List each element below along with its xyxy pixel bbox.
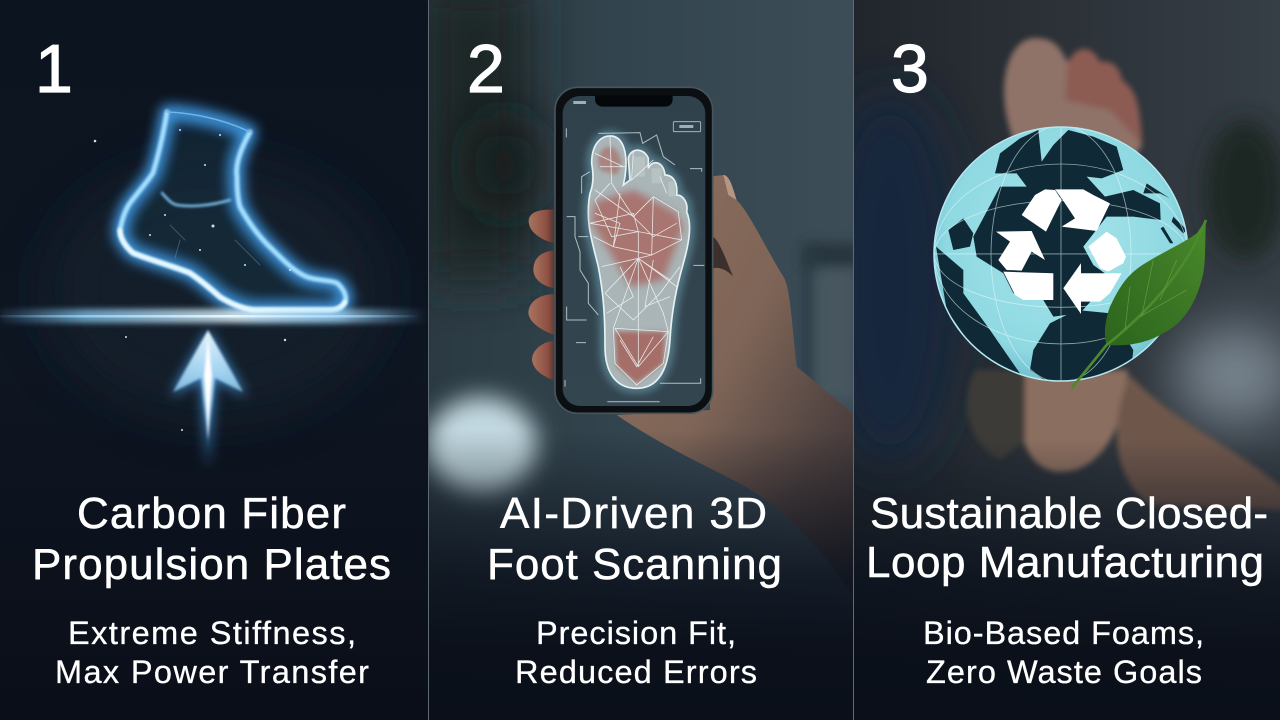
divider — [853, 0, 854, 720]
heading: carbon fiber: Carbon Fiber — [77, 489, 346, 538]
panel: AI-driven 3D foot scanning — [420, 0, 863, 720]
icon: hand holding phone — [528, 87, 857, 600]
number 1: 1 — [35, 31, 73, 107]
number 2: 2 — [467, 31, 505, 107]
text: stiffness: Extreme Stiffness, — [68, 615, 356, 651]
heading: sustainable: Sustainable Closed- — [870, 489, 1268, 538]
blurred feet — [967, 38, 1280, 510]
icon: globe — [934, 126, 1206, 388]
text: stiffness: Max Power Transfer — [55, 654, 369, 690]
divider — [428, 0, 429, 720]
blurred lamp — [427, 397, 537, 493]
heading: AI scanning: AI-Driven 3D — [500, 489, 767, 538]
icon: leaf — [1072, 220, 1206, 388]
icon: upward arrow — [170, 330, 247, 470]
continents — [936, 130, 1187, 385]
text: bio-based: Bio-Based Foams, — [923, 615, 1204, 651]
text: precision: Reduced Errors — [515, 654, 757, 690]
heading: AI scanning: Foot Scanning — [487, 540, 782, 589]
heading: AI scanning — [487, 489, 782, 589]
text: bio-based: Zero Waste Goals — [926, 654, 1202, 690]
number 3: 3 — [891, 31, 929, 107]
panel: sustainable closed-loop manufacturing — [854, 0, 1280, 684]
foot scan — [588, 136, 690, 388]
icon: glowing foot outline — [94, 112, 346, 431]
horizontal light beam — [0, 309, 428, 323]
heading: carbon fiber: Propulsion Plates — [32, 540, 391, 589]
heading: carbon fiber — [32, 489, 391, 589]
panel: carbon fiber propulsion plates — [0, 0, 428, 720]
heading: sustainable: Loop Manufacturing — [866, 538, 1264, 587]
fingers — [528, 210, 554, 380]
text: precision — [518, 620, 756, 684]
heading: sustainable — [866, 489, 1268, 587]
text: bio-based — [926, 620, 1202, 684]
icon: recycling symbol — [996, 189, 1126, 314]
phone — [555, 87, 713, 413]
text: precision: Precision Fit, — [536, 615, 736, 651]
text: stiffness — [58, 620, 369, 684]
